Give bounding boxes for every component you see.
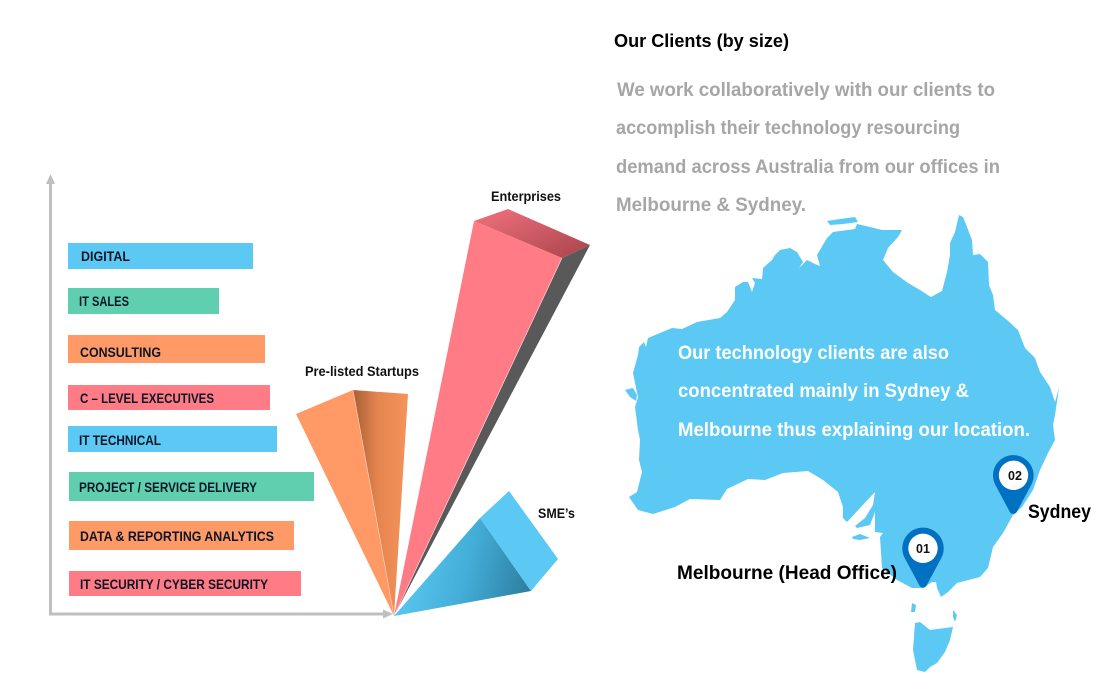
map callout text: Our technology clients are also [678,343,949,364]
heading: Our Clients (by size) [614,30,789,51]
bar: IT Technical: IT TECHNICAL [79,433,161,448]
chart axes [46,174,393,618]
pin: Melbourne 01: 01 [916,542,930,556]
bar: C-Level Executives [68,385,270,410]
label: Sydney: Sydney [1028,501,1091,523]
label: Melbourne Head Office: Melbourne (Head Office) [677,562,897,584]
bar: Consulting: CONSULTING [80,345,161,360]
bar: IT Security / Cyber Security: IT SECURITY / CYBER SECURITY [80,577,268,592]
map of Australia [625,215,1059,672]
bar: Data & Reporting Analytics: DATA & REPORTING ANALYTICS [80,529,274,544]
3D spike: Enterprises [394,209,590,616]
label: SMEs: SME’s [538,506,575,521]
map callout text: concentrated mainly in Sydney & [678,381,969,402]
bar: IT Sales: IT SALES [79,294,129,309]
bar: Digital: DIGITAL [81,249,130,264]
bar: Data & Reporting Analytics [69,521,294,550]
map callout text [678,343,1030,441]
pin: Sydney 02: 02 [1008,469,1022,483]
bar: C-Level Executives: C – LEVEL EXECUTIVES [80,391,214,406]
3D spike: SMEs [394,491,558,616]
bar: Project / Service Delivery: PROJECT / SERVICE DELIVERY [79,480,257,495]
bar: Digital [68,243,253,269]
intro paragraph: accomplish their technology resourcing [616,118,960,139]
bar: IT Technical [68,426,277,452]
bar: IT Security / Cyber Security [69,571,301,596]
label: Enterprises: Enterprises [491,189,561,204]
intro paragraph: demand across Australia from our offices in [616,157,1000,178]
label: Pre-listed Startups: Pre-listed Startups [305,364,419,379]
bar: IT Sales [68,288,219,314]
map callout text: Melbourne thus explaining our location. [678,420,1030,441]
pin: Melbourne 01 [902,528,944,588]
bar: Consulting [68,335,265,363]
pin: Sydney 02 [993,455,1034,514]
intro paragraph: Melbourne & Sydney. [616,195,806,216]
intro paragraph [616,80,1000,216]
3D spike: Pre-listed Startups [296,390,408,616]
bar: Project / Service Delivery [69,472,314,501]
intro paragraph: We work collaboratively with our clients to [617,80,995,101]
